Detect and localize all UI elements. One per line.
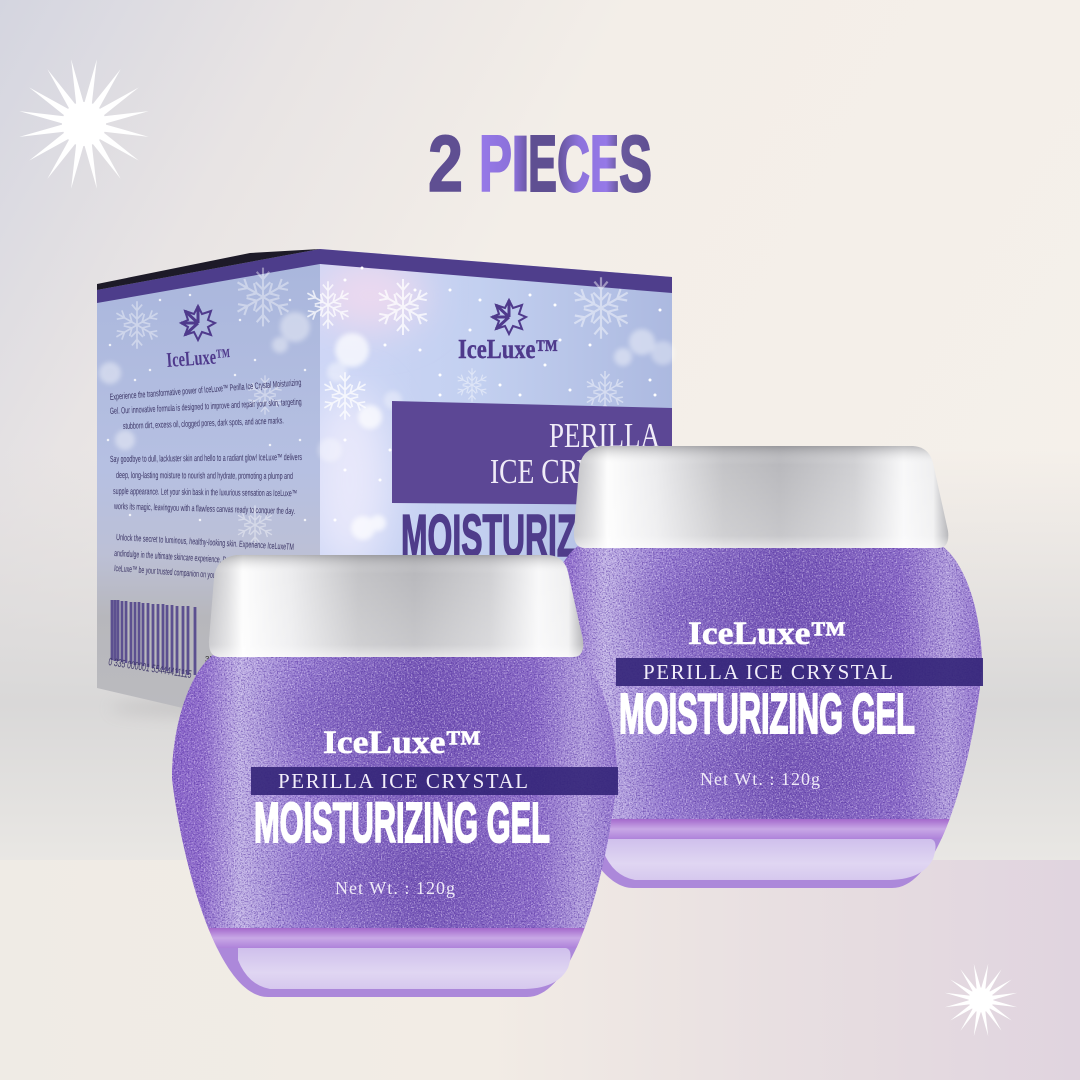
box description text: andindulge in the ultimate skincare experience. P (114, 548, 226, 565)
product box (97, 249, 675, 740)
box description text: Unlock the secret to luminous, healthy-looking skin. Experience IceLuxeTM (116, 532, 294, 552)
box purple band: ICE CRYSTAL (490, 452, 663, 491)
box product name: MOISTURIZING (401, 503, 633, 569)
title: S (619, 119, 652, 208)
label: IceLuxe™ (323, 725, 481, 761)
jar glass and gel (525, 541, 995, 888)
box description text: Experience the transformative power of IceLuxe™ Perilla Ice Crystal Moisturizing (109, 377, 302, 402)
box left face (97, 249, 320, 740)
title: 2 (428, 119, 463, 208)
barcode: 3M (205, 655, 216, 664)
label: MOISTURIZING GEL (254, 791, 550, 855)
title: P (479, 119, 512, 208)
box description text: Say goodbye to dull, lackluster skin and hello to a radiant glow! IceLuxe™ delivers (110, 452, 302, 464)
jar: left (160, 555, 630, 997)
title: I (510, 119, 532, 208)
box left face: IceLuxe™ (166, 344, 231, 372)
box description text: works its magic, leavingyou with a flawless canvas ready to conquer the day. (113, 501, 295, 516)
label: Net Wt. : 120g (700, 769, 820, 789)
box description text: supple appearance. Let your skin bask in the luxurious sensation as IceLuxe™ (113, 486, 297, 498)
label (616, 616, 983, 789)
icon: large white sparkle (18, 58, 150, 190)
box purple band (392, 401, 672, 505)
lid (209, 555, 583, 657)
title: E (528, 119, 557, 208)
jar glass and gel (160, 650, 630, 997)
label: PERILLA ICE CRYSTAL (643, 660, 893, 684)
label (251, 725, 618, 898)
icon: small white sparkle (944, 963, 1018, 1037)
barcode: 0 335 000001 55444411115 (108, 656, 192, 681)
title: C (557, 119, 590, 208)
box purple band: PERILLA (549, 416, 661, 455)
title (428, 119, 652, 208)
label: IceLuxe™ (688, 616, 846, 652)
title: E (590, 119, 619, 208)
box description text: deep, long-lasting moisture to nourish and hydrate, promoting a plump and (116, 470, 293, 481)
jar: right (525, 446, 995, 888)
box description text (109, 377, 302, 580)
box right face (307, 249, 672, 562)
lid (574, 446, 948, 548)
label: Net Wt. : 120g (335, 878, 455, 898)
box description text: IceLuxe™ be your trusted companion on your j (114, 563, 220, 580)
label: PERILLA ICE CRYSTAL (278, 769, 528, 793)
barcode (108, 600, 216, 681)
box right face: IceLuxe™ (458, 334, 558, 364)
box description text: Gel. Our innovative formula is designed to improve and repair your skin, targeting (110, 397, 302, 416)
box description text: stubborn dirt, excess oil, clogged pores, dark spots, and acne marks. (123, 415, 284, 431)
